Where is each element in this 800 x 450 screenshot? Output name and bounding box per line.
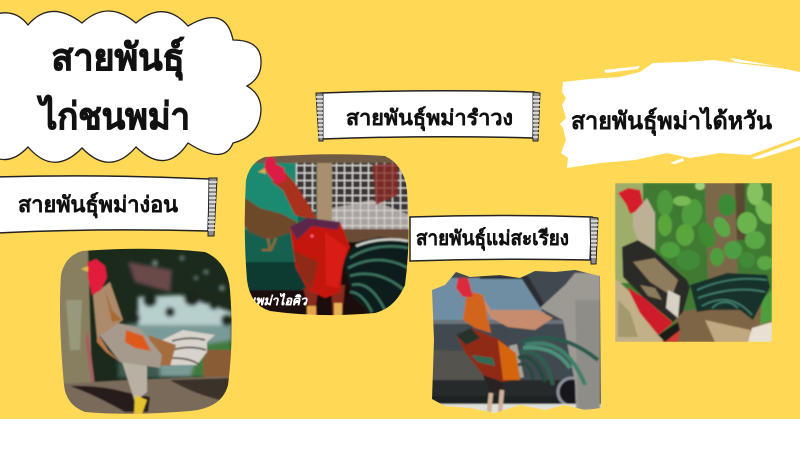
banner: พม่ารำวง <box>316 91 540 141</box>
ground <box>64 376 229 414</box>
rooster head <box>618 188 643 214</box>
title text: ไก่ชนพม่า <box>36 94 190 137</box>
rooster tail <box>513 338 598 385</box>
rooster red belly <box>627 287 673 335</box>
brush banner text: สายพันธุ์พม่าได้หวัน <box>571 106 773 137</box>
rooster body <box>622 240 690 322</box>
rooster body <box>456 328 520 382</box>
rooster tail <box>148 330 215 366</box>
banner text: สายพันธุ์พม่าง่อน <box>18 192 178 219</box>
photo: พม่าง่อน rooster <box>58 245 238 420</box>
car door <box>430 320 570 324</box>
rooster tail <box>343 237 410 316</box>
rooster neck <box>272 170 317 218</box>
grey shirt <box>540 273 600 410</box>
rooster legs <box>483 375 503 413</box>
scroll roll <box>208 178 217 236</box>
rooster legs <box>303 285 345 318</box>
sky and foliage patches <box>118 256 233 378</box>
brush shape <box>560 60 800 168</box>
watermark text: นพม่าไอคิว <box>247 293 309 308</box>
scroll roll <box>590 217 598 264</box>
rooster neck <box>633 198 655 250</box>
window grid <box>332 163 410 229</box>
foliage <box>656 183 772 270</box>
photo: แม่สะเรียง rooster <box>430 268 602 418</box>
background rooster <box>243 198 297 240</box>
teal netting <box>244 162 318 263</box>
trunk <box>58 250 92 390</box>
left scroll roll <box>316 93 323 141</box>
light leaf dapples <box>152 256 224 290</box>
rooster neck <box>93 282 123 338</box>
photo: พม่าได้หวัน rooster <box>615 181 778 342</box>
rooster head <box>264 156 286 184</box>
banner: แม่สะเรียง <box>410 216 598 264</box>
rooster head <box>87 259 107 295</box>
title text <box>36 37 190 137</box>
rooster legs <box>122 362 147 414</box>
banner text: สายพันธุ์พม่ารำวง <box>346 106 513 132</box>
tree trunk <box>705 183 738 280</box>
title cloud <box>0 11 261 162</box>
rooster body <box>97 322 162 368</box>
title text: สายพันธุ์ <box>52 37 184 81</box>
arm <box>483 300 554 331</box>
car window <box>430 278 545 320</box>
rooster head <box>456 278 473 297</box>
dark leaf dapples <box>128 290 233 326</box>
rooster body <box>290 218 350 298</box>
banner text: สายพันธุ์แม่สะเรียง <box>416 227 569 251</box>
banner: พม่าง่อน <box>0 176 217 236</box>
clay pot <box>203 350 234 380</box>
ground <box>615 278 665 342</box>
rooster neck <box>463 292 491 333</box>
brush stroke banner: พม่าได้หวัน <box>560 58 800 168</box>
cloud shape <box>0 11 261 162</box>
rooster tail <box>690 273 770 320</box>
right scroll roll <box>533 92 540 141</box>
photo: พม่าไอคิว red rooster <box>243 150 413 320</box>
